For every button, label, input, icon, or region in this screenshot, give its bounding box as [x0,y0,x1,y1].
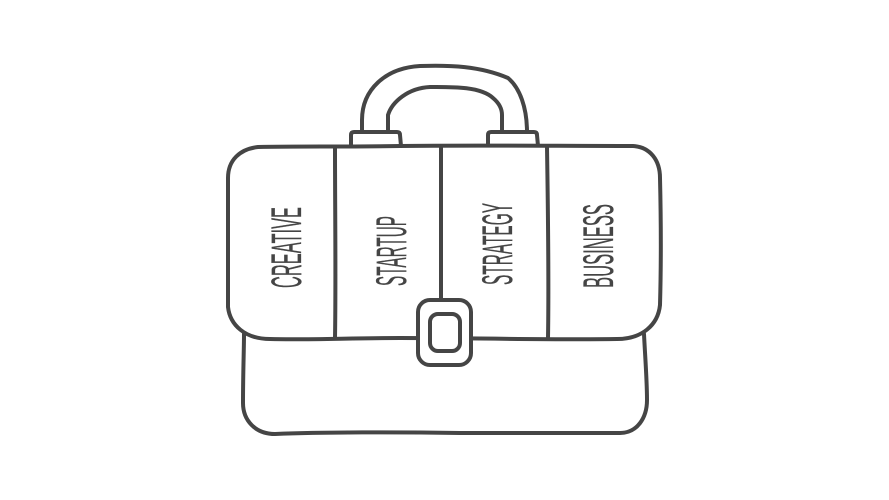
flap dividers [335,146,548,338]
left handle clasp [351,132,401,146]
briefcase illustration: STARTUP [368,216,416,286]
briefcase illustration: STRATEGY [474,203,522,285]
case lower body [243,334,647,434]
briefcase illustration: CREATIVE [263,207,311,288]
briefcase illustration: BUSINESS [575,204,623,288]
buckle inner [430,314,460,351]
buckle outer [418,300,471,365]
briefcase handle [362,66,527,132]
right handle clasp [488,132,538,146]
case flap [228,146,661,339]
